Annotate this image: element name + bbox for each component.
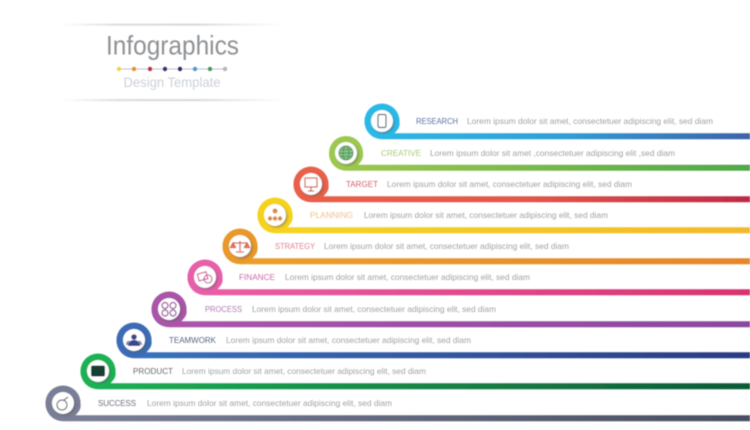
- row: planning: [258, 198, 750, 233]
- label: research: RESEARCH: [416, 116, 458, 126]
- row: success: [46, 386, 750, 421]
- row: product: [80, 354, 750, 389]
- icon: team: [126, 334, 142, 346]
- icon: money: [197, 272, 212, 283]
- row: strategy: [222, 228, 750, 264]
- bottom divider shadow: [62, 100, 286, 101]
- subtitle: Design Template: [124, 74, 221, 90]
- label: planning: PLANNING: [310, 210, 353, 220]
- label: finance: FINANCE: [239, 272, 275, 282]
- description: Lorem ipsum dolor sit amet, consectetuer adipiscing elit, sed diam: [182, 366, 426, 376]
- label: creative: CREATIVE: [381, 148, 421, 158]
- icon: globe: [339, 146, 353, 160]
- icon: presentation board: [305, 178, 317, 191]
- timeline of coloured dots: [117, 67, 227, 71]
- icon: gears: [162, 302, 176, 316]
- label: product: PRODUCT: [133, 366, 173, 376]
- icon: phone: [378, 114, 386, 128]
- row: teamwork: [116, 322, 750, 358]
- icon: hierarchy: [268, 208, 282, 221]
- title block: [62, 24, 286, 101]
- description: Lorem ipsum dolor sit amet, consectetuer adipiscing elit, sed diam: [387, 179, 632, 189]
- row: creative: [329, 136, 750, 171]
- label: teamwork: TEAMWORK: [169, 335, 216, 345]
- icon: scales: [230, 241, 250, 252]
- label: process: PROCESS: [205, 304, 242, 314]
- title: Infographics: [106, 30, 239, 60]
- row: process: [152, 292, 750, 327]
- description: Lorem ipsum dolor sit amet, consectetuer adipiscing elit, sed diam: [252, 304, 496, 314]
- icon: product box: [91, 366, 105, 376]
- description: Lorem ipsum dolor sit amet, consectetuer adipiscing elit, sed diam: [364, 210, 608, 220]
- top divider shadow: [62, 24, 284, 25]
- row: finance: [188, 260, 750, 295]
- description: Lorem ipsum dolor sit amet, consectetuer adipiscing elit, sed diam: [324, 241, 569, 251]
- description: Lorem ipsum dolor sit amet ,consectetuer adipiscing elit ,sed diam: [430, 148, 675, 158]
- description: Lorem ipsum dolor sit amet, consectetuer adipiscing elit, sed diam: [467, 116, 713, 126]
- description: Lorem ipsum dolor sit amet, consectetuer adipiscing elit, sed diam: [147, 398, 392, 408]
- label: success: SUCCESS: [98, 398, 136, 408]
- label: strategy: STRATEGY: [275, 241, 315, 251]
- icon: target apple: [57, 397, 68, 410]
- row: research: [364, 104, 750, 139]
- label: target: TARGET: [346, 179, 378, 189]
- description: Lorem ipsum dolor sit amet, consectetuer adipiscing elit, sed diam: [285, 272, 530, 282]
- row: target: [294, 166, 750, 202]
- description: Lorem ipsum dolor sit amet, consectetuer adipiscing elit, sed diam: [226, 335, 471, 345]
